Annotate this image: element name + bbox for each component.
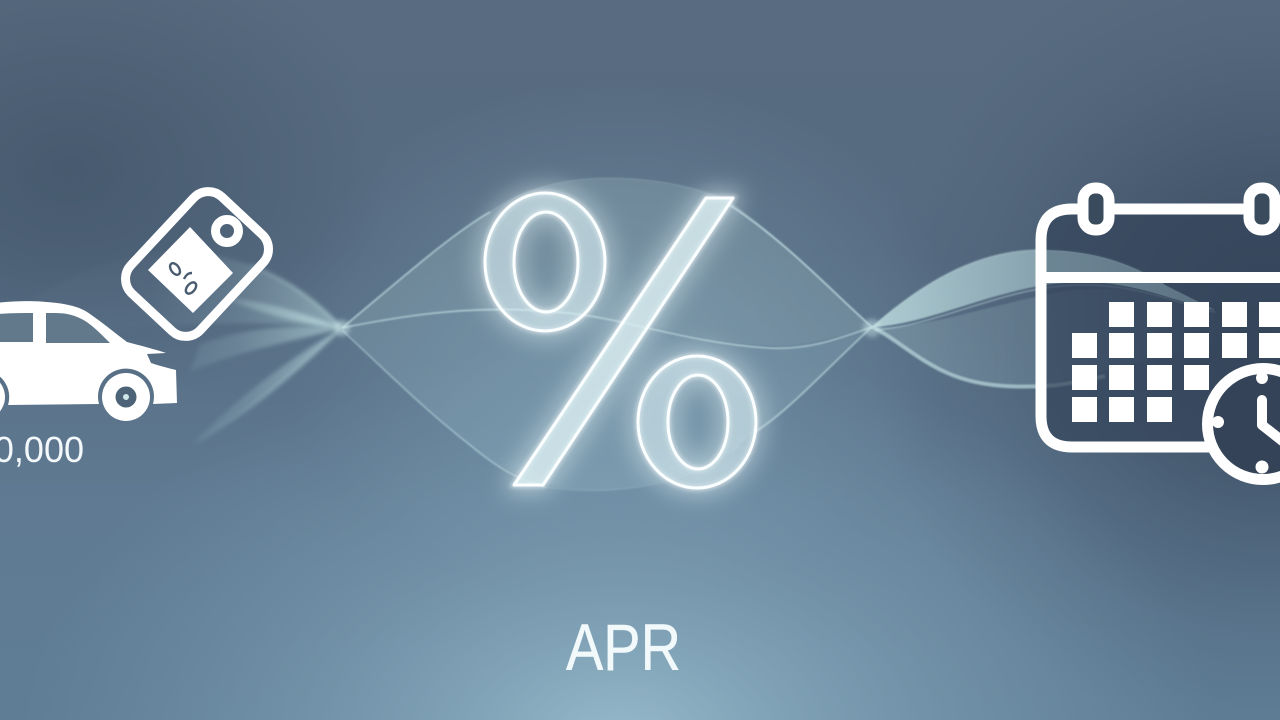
tag outline <box>117 183 277 345</box>
percent inner glow <box>485 193 756 488</box>
wave: central lens <box>342 178 872 490</box>
icon: calendar with clock <box>1041 188 1280 480</box>
car body <box>0 301 177 405</box>
icon: price tag <box>117 183 277 345</box>
percent top ring <box>485 193 605 331</box>
wave: left fan <box>30 253 342 443</box>
percent slash <box>514 198 733 485</box>
calendar left ring <box>1083 188 1109 230</box>
percent bottom ring <box>638 356 756 488</box>
icon: glowing percent sign <box>485 193 756 488</box>
APR label: APR <box>566 610 681 684</box>
tag label marks <box>168 261 198 296</box>
percent outer glow <box>485 193 756 488</box>
calendar outline <box>1041 209 1280 447</box>
wave: right lens <box>872 250 1230 387</box>
silk wave ribbon <box>30 178 1230 490</box>
calendar right ring <box>1249 188 1275 230</box>
car front wheel <box>102 373 150 421</box>
car rear wheel <box>0 374 5 420</box>
calendar wave overlay <box>1041 250 1215 310</box>
calendar face <box>1041 209 1280 447</box>
icon: car <box>0 301 177 421</box>
tag label <box>148 227 233 313</box>
clock <box>1208 368 1280 480</box>
calendar header line <box>1041 272 1280 283</box>
wave: crossing highlights <box>334 319 881 337</box>
tag hole <box>216 220 238 242</box>
car windows <box>0 313 33 342</box>
calendar date grid <box>1072 302 1280 422</box>
